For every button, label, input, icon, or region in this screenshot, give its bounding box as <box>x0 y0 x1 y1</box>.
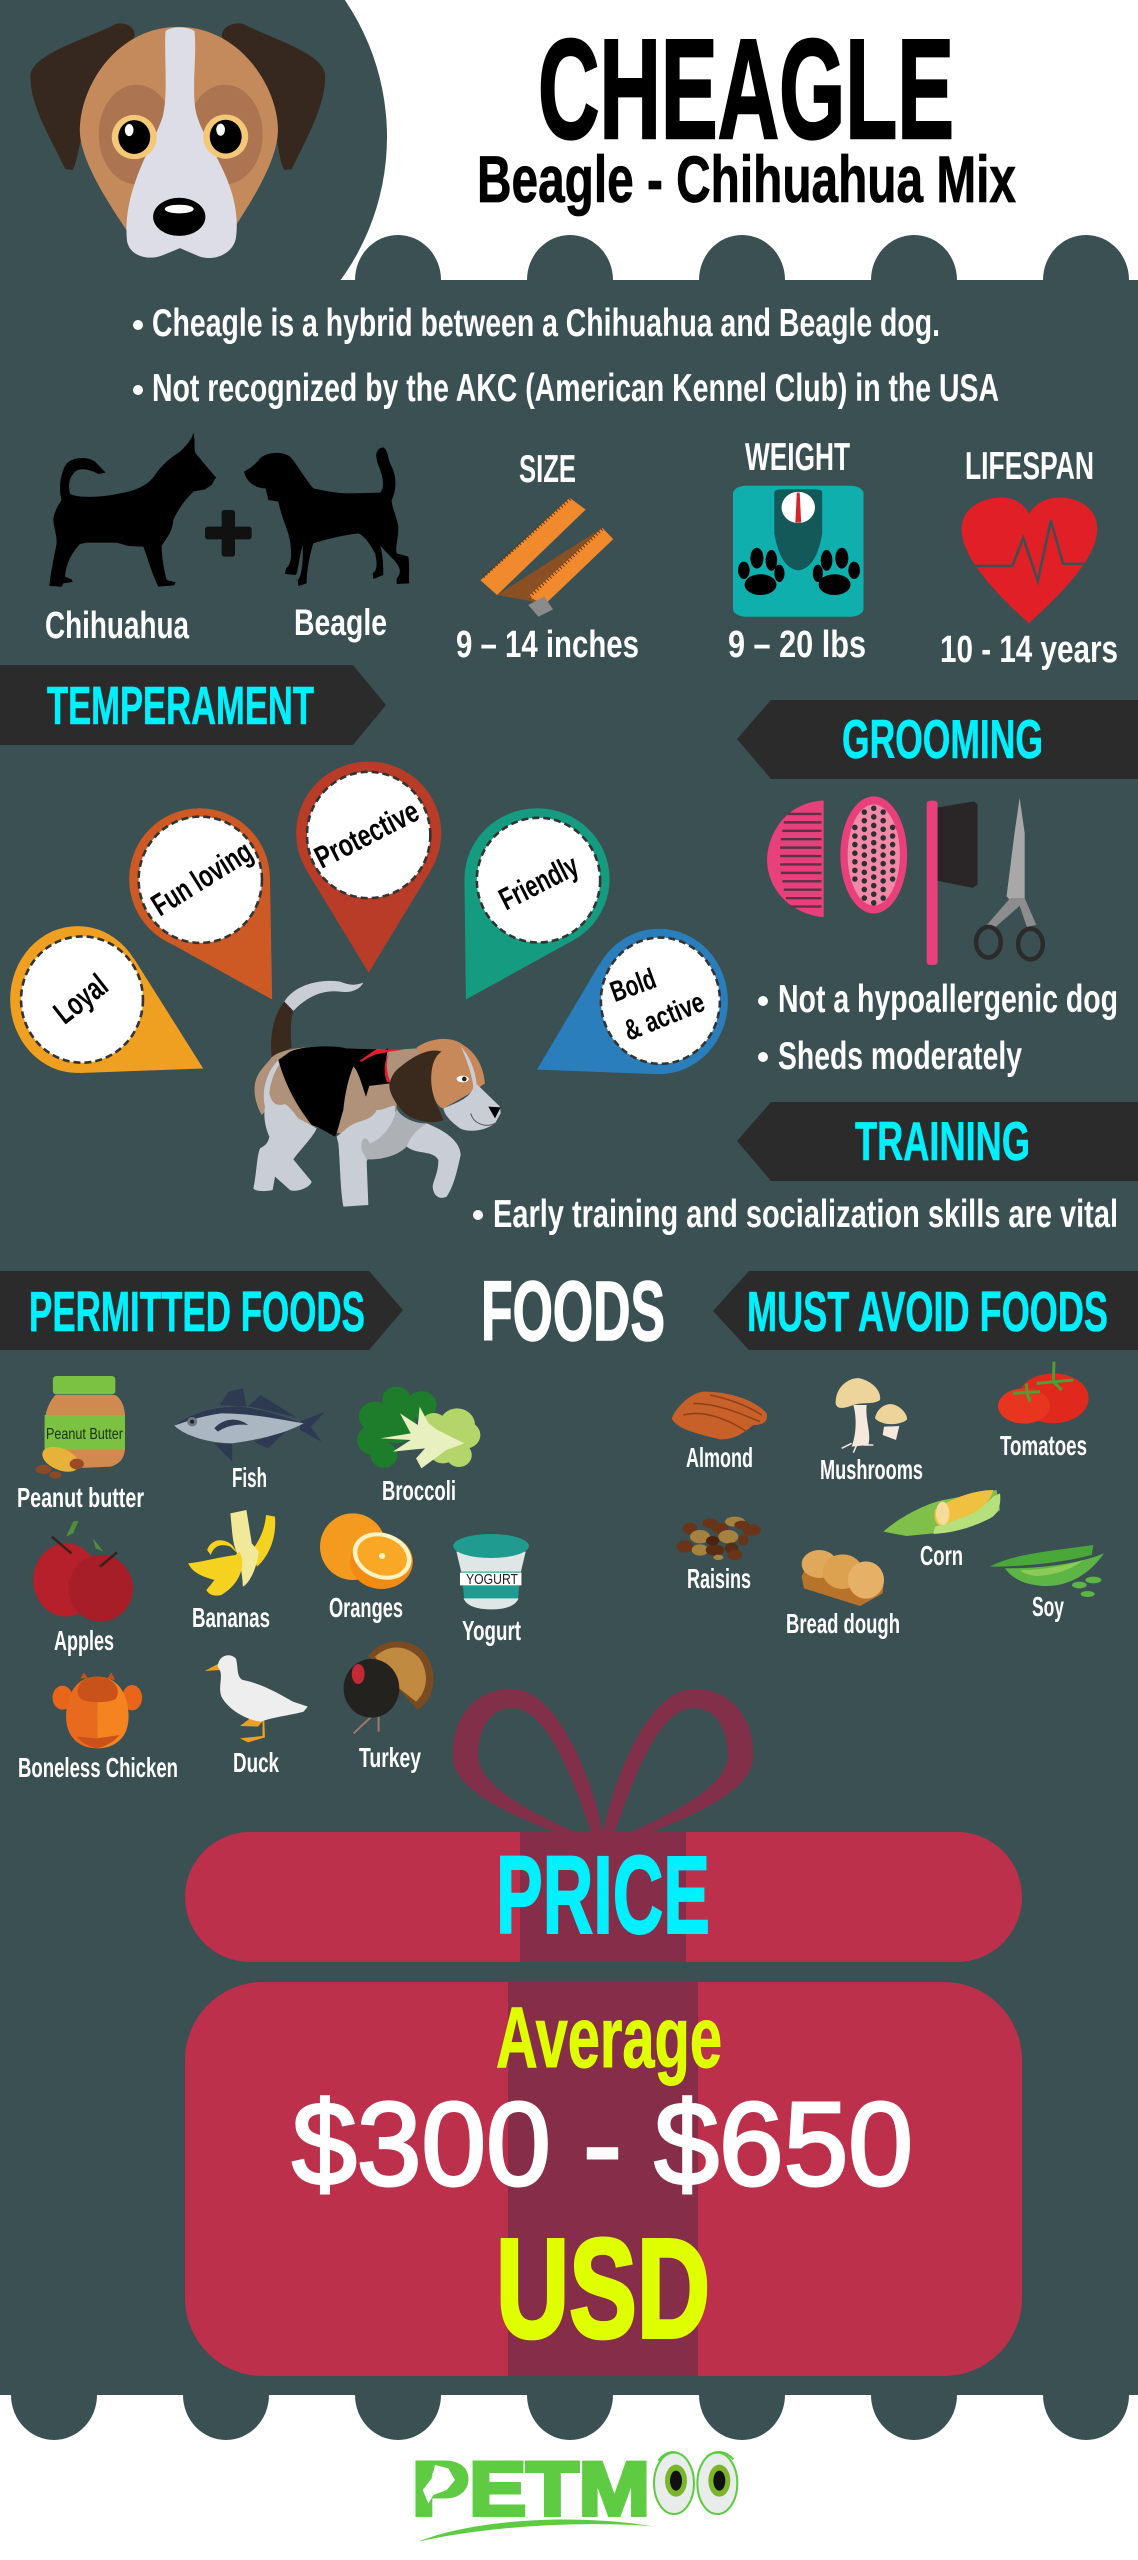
label: apples: Apples <box>54 1625 114 1656</box>
pin: Friendly <box>464 808 610 1000</box>
pin: Bold and active <box>537 929 728 1074</box>
banner: temperament: TEMPERAMENT <box>47 676 314 736</box>
banner: permitted foods: PERMITTED FOODS <box>29 1280 365 1344</box>
banner: temperament <box>0 665 386 745</box>
heading: foods: FOODS <box>481 1264 665 1358</box>
pin: Fun loving: Fun loving <box>145 834 259 923</box>
icon: tomatoes <box>998 1362 1089 1424</box>
label: fish: Fish <box>232 1462 267 1493</box>
icon: measuring tape <box>480 498 613 617</box>
label: Chihuahua: Chihuahua <box>45 605 190 647</box>
icon: dog head <box>30 23 325 258</box>
icon: plus <box>205 510 252 557</box>
label: bread dough: Bread dough <box>786 1608 900 1639</box>
icon: comb <box>767 801 824 917</box>
label: turkey: Turkey <box>359 1742 421 1773</box>
banner: permitted foods <box>0 1271 403 1350</box>
label: bananas: Bananas <box>192 1602 270 1633</box>
panel: gift lid with price heading <box>185 1832 1022 1962</box>
banner: training <box>737 1102 1138 1181</box>
label: corn: Corn <box>920 1540 963 1571</box>
label: Beagle: Beagle <box>294 602 387 643</box>
icon: bananas <box>188 1510 275 1596</box>
footer white band with scallops <box>0 2395 1138 2560</box>
pin: Loyal <box>10 926 203 1073</box>
label: boneless chicken: Boneless Chicken <box>18 1752 178 1783</box>
pin: Fun loving <box>129 808 272 1000</box>
icon: heart with pulse <box>962 497 1097 623</box>
jar text: Peanut Butter <box>46 1426 124 1443</box>
weight value: 9 – 20 lbs <box>728 624 866 666</box>
icon: boneless chicken <box>52 1673 142 1748</box>
size value: 9 – 14 inches <box>456 624 639 666</box>
icon: pet scale <box>733 486 864 617</box>
grooming bullets <box>758 978 1118 1078</box>
panel: gift box with price values: $300 - $650 <box>292 2078 913 2211</box>
icon: chihuahua silhouette <box>49 433 216 587</box>
icon: fish <box>174 1388 325 1462</box>
label: duck: Duck <box>233 1747 279 1778</box>
yogurt cup text: YOGURT <box>466 1571 518 1588</box>
icon: turkey <box>344 1641 434 1733</box>
label: peanut butter: Peanut butter <box>17 1482 144 1513</box>
panel: gift box with price values: Average <box>496 1990 722 2086</box>
label: mushrooms: Mushrooms <box>820 1454 923 1485</box>
icon: raisins <box>677 1517 761 1560</box>
icon: bread dough <box>802 1550 884 1606</box>
pin: Protective: Protective <box>309 793 425 875</box>
label: broccoli: Broccoli <box>382 1475 456 1506</box>
gift bow <box>453 1689 753 1832</box>
icon: mushrooms <box>836 1378 907 1453</box>
panel: gift box with price values <box>185 1982 1022 2376</box>
icon: deshedding brush <box>927 801 978 965</box>
icon: almonds <box>672 1392 767 1439</box>
pin: Bold and active: Bold <box>606 963 660 1009</box>
banner: training: TRAINING <box>855 1110 1030 1172</box>
icon: yogurt <box>453 1534 529 1609</box>
panel: gift box with price values: USD <box>496 2209 710 2367</box>
icon: peanut butter jar <box>36 1376 125 1479</box>
header white band with scallops <box>0 0 1138 381</box>
icon: duck <box>205 1655 308 1742</box>
icon: soy pods <box>990 1545 1104 1597</box>
weight heading: WEIGHT <box>745 436 850 479</box>
icon: corn <box>883 1490 1000 1536</box>
pin: Friendly: Friendly <box>493 847 585 917</box>
label: yogurt: Yogurt <box>462 1615 521 1646</box>
intro bullets <box>133 302 999 410</box>
pin: Bold and active: & active <box>619 986 709 1047</box>
icon: pin brush <box>840 796 907 913</box>
illustration: walking beagle <box>253 981 501 1207</box>
icon: broccoli <box>357 1387 480 1468</box>
pin: Protective <box>296 762 441 973</box>
logo: PetMoo: PETM <box>412 2447 650 2532</box>
banner: grooming <box>737 700 1138 779</box>
label: soy: Soy <box>1032 1591 1064 1622</box>
logo: PetMoo <box>412 2447 737 2542</box>
label: oranges: Oranges <box>329 1592 403 1623</box>
pin: Loyal: Loyal <box>47 967 115 1031</box>
size heading: SIZE <box>519 448 576 491</box>
icon: scissors <box>976 798 1043 959</box>
grooming bullets: Sheds moderately <box>778 1035 1022 1078</box>
label: raisins: Raisins <box>687 1563 751 1594</box>
label: tomatoes: Tomatoes <box>1000 1430 1087 1461</box>
icon: apples <box>33 1521 133 1622</box>
label: almond: Almond <box>686 1442 753 1473</box>
icon: oranges <box>320 1513 420 1589</box>
panel: gift lid with price heading: PRICE <box>496 1834 710 1957</box>
icon: beagle silhouette <box>244 447 409 586</box>
